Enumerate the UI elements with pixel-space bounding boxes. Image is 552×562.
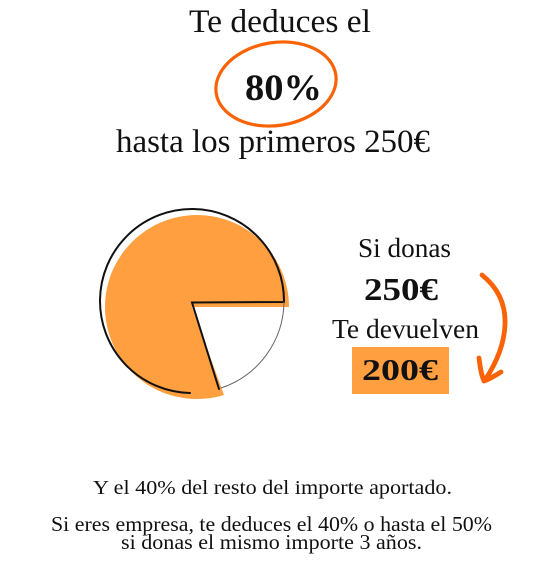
amount: 250€: 250€ — [364, 271, 438, 307]
text: company deduction note: Si eres empresa, te deduces el 40% o hasta el 50% — [51, 512, 492, 536]
title: Te deduces el: Te deduces el — [189, 4, 371, 40]
text: company deduction note — [51, 512, 492, 554]
value: 80%: 80% — [245, 68, 322, 109]
arrow: orange curved arrow down — [479, 275, 505, 381]
text: company deduction note: si donas el mismo importe 3 años. — [121, 530, 422, 554]
highlight: 80% circled — [210, 34, 342, 134]
pie outline: black sketch — [100, 209, 284, 393]
text: Y el 40% del resto: Y el 40% del resto del importe aportado. — [93, 477, 452, 499]
subtitle: hasta los primeros 250€: hasta los primeros 250€ — [116, 124, 430, 160]
text: Si donas: Si donas — [358, 233, 451, 263]
pie chart: 80 percent deducted — [100, 209, 289, 399]
pie fill: orange 80 percent slice — [105, 215, 289, 399]
text: Te devuelven: Te devuelven — [332, 314, 480, 344]
icon: orange hand-drawn ellipse — [210, 34, 342, 134]
highlighted amount: 200€: 200€ — [362, 352, 439, 387]
highlighted amount: 200€ — [352, 347, 449, 394]
